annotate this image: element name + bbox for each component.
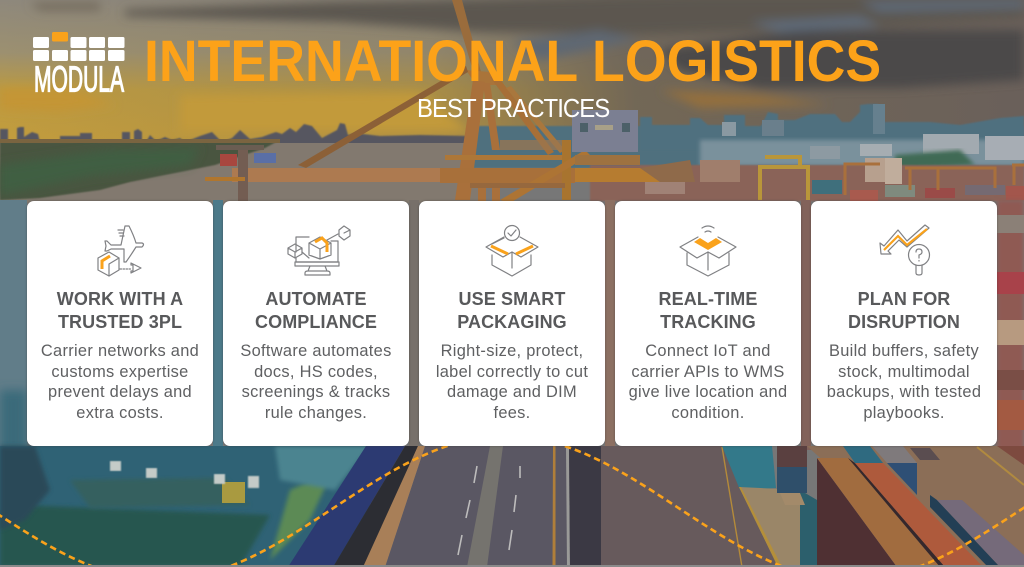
heading: TRUSTED 3PL xyxy=(58,312,182,332)
subtitle: BEST PRACTICES xyxy=(417,95,609,123)
crane machinery house xyxy=(572,110,638,152)
body text xyxy=(41,342,199,422)
yard right of road xyxy=(722,446,776,490)
body text: carrier APIs to WMS xyxy=(631,363,785,381)
right edge containers xyxy=(997,200,1024,450)
body text: backups, with tested xyxy=(827,383,981,401)
body text: Carrier networks and xyxy=(41,342,199,360)
icon: down-trend arrow and magnifier xyxy=(879,224,930,276)
body text: condition. xyxy=(671,404,745,422)
body text: docs, HS codes, xyxy=(254,363,378,381)
body text: Software automates xyxy=(240,342,392,360)
blue hull strip xyxy=(288,446,405,567)
body text: extra costs. xyxy=(76,404,164,422)
icon: box with signal waves xyxy=(679,225,737,277)
left gantry with flag xyxy=(238,150,248,202)
body text xyxy=(629,342,787,422)
logo xyxy=(33,32,124,96)
body text: playbooks. xyxy=(863,404,945,422)
ship deck (bottom left) xyxy=(0,446,370,567)
body text: rule changes. xyxy=(265,404,367,422)
body text: stock, multimodal xyxy=(838,363,970,381)
heading xyxy=(457,289,567,332)
body text: Build buffers, safety xyxy=(829,342,979,360)
gaps between cards xyxy=(213,200,223,450)
river bank and water xyxy=(0,143,480,203)
heading: TRACKING xyxy=(660,312,756,332)
heading: USE SMART xyxy=(459,289,565,309)
body text: screenings & tracks xyxy=(242,383,390,401)
body text xyxy=(827,342,981,422)
icon: box with checkmark xyxy=(485,224,539,277)
panel: plan for disruption xyxy=(811,201,997,446)
body text: damage and DIM xyxy=(447,383,577,401)
container yard xyxy=(590,165,1024,201)
roads xyxy=(385,446,602,567)
body text: Connect IoT and xyxy=(645,342,771,360)
stacked containers xyxy=(817,458,897,567)
heading: DISRUPTION xyxy=(848,312,960,332)
body text xyxy=(240,342,392,422)
heading: PACKAGING xyxy=(457,312,567,332)
skyline left xyxy=(0,123,470,148)
body text: Right-size, protect, xyxy=(441,342,583,360)
heading xyxy=(255,289,377,332)
heading: COMPLIANCE xyxy=(255,312,377,332)
body text: label correctly to cut xyxy=(436,363,588,381)
body text: prevent delays and xyxy=(48,383,192,401)
panel: automate compliance xyxy=(223,201,409,446)
panel: use smart packaging xyxy=(419,201,605,446)
heading xyxy=(848,289,960,332)
icon: plane and box xyxy=(97,225,144,277)
body text: fees. xyxy=(493,404,531,422)
panel: real-time tracking xyxy=(615,201,801,446)
left strip xyxy=(0,200,27,446)
icon: computer with boxes xyxy=(287,225,351,276)
body text xyxy=(436,342,588,422)
city on the right xyxy=(470,126,1024,168)
clouds xyxy=(0,0,1024,132)
heading: WORK WITH A xyxy=(57,289,183,309)
body text: customs expertise xyxy=(51,363,189,381)
heading xyxy=(56,289,183,332)
dashed wave line xyxy=(0,436,1024,567)
yellow gantries xyxy=(760,157,808,200)
title: INTERNATIONAL LOGISTICS xyxy=(144,29,881,94)
heading: REAL-TIME xyxy=(659,289,757,309)
heading: AUTOMATE xyxy=(265,289,367,309)
body text: give live location and xyxy=(629,383,787,401)
panel: work with a trusted 3PL xyxy=(27,201,213,446)
big crane xyxy=(232,0,695,203)
heading: PLAN FOR xyxy=(858,289,950,309)
heading xyxy=(659,289,757,332)
